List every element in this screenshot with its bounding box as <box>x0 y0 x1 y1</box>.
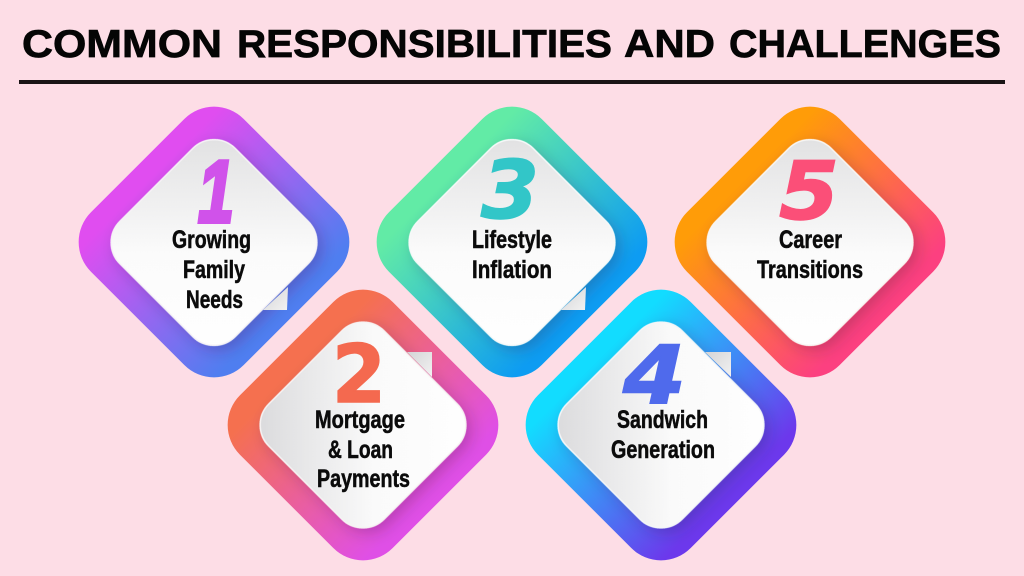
label 1: Growing <box>172 226 251 254</box>
diamond card 3 <box>397 127 627 358</box>
number 1: 1 <box>198 142 234 241</box>
label 4 <box>611 406 715 464</box>
diamond frame 3 <box>359 89 665 395</box>
label 2 <box>315 406 410 493</box>
diamond frame 1 <box>61 89 367 395</box>
label 5 <box>757 226 863 284</box>
label 1: Needs <box>186 286 243 314</box>
diamond frame 2 <box>210 272 516 576</box>
panel: 1 Growing Family Needs <box>61 89 367 395</box>
diamond card 1 <box>99 127 329 358</box>
diamond card 4 <box>546 310 776 540</box>
title underline <box>19 80 1005 84</box>
label 5: Transitions <box>757 256 863 284</box>
label 1 <box>172 226 251 314</box>
panel: 3 Lifestyle Inflation <box>359 89 665 395</box>
page fold 4 <box>705 352 731 377</box>
title: RESPONSIBILITIES <box>237 23 612 66</box>
label 2: & Loan <box>328 436 393 464</box>
label 3: Inflation <box>472 256 552 284</box>
number 4: 4 <box>622 329 686 422</box>
panel: 5 Career Transitions <box>657 89 963 395</box>
title: COMMON <box>22 23 222 66</box>
label 4: Generation <box>611 436 715 464</box>
title: AND <box>624 23 715 66</box>
title: CHALLENGES <box>729 23 1001 66</box>
panel: 2 Mortgage & Loan Payments <box>210 272 516 576</box>
diamond card 5 <box>695 127 925 358</box>
number 3: 3 <box>481 144 539 237</box>
panel: 4 Sandwich Generation <box>508 272 814 576</box>
diamond card 2 <box>248 310 478 540</box>
diamond frame 4 <box>508 272 814 576</box>
page fold 3 <box>561 287 586 310</box>
label 2: Mortgage <box>315 406 405 434</box>
label 3 <box>472 226 552 284</box>
number 2: 2 <box>332 328 386 421</box>
title <box>22 23 1001 66</box>
label 3: Lifestyle <box>472 226 552 254</box>
label 5: Career <box>779 226 842 254</box>
label 1: Family <box>183 256 245 284</box>
label 4: Sandwich <box>617 406 708 434</box>
diamond frame 5 <box>657 89 963 395</box>
page fold 2 <box>407 352 432 377</box>
number 5: 5 <box>779 145 839 238</box>
page fold 1 <box>263 287 288 310</box>
label 2: Payments <box>317 465 410 493</box>
